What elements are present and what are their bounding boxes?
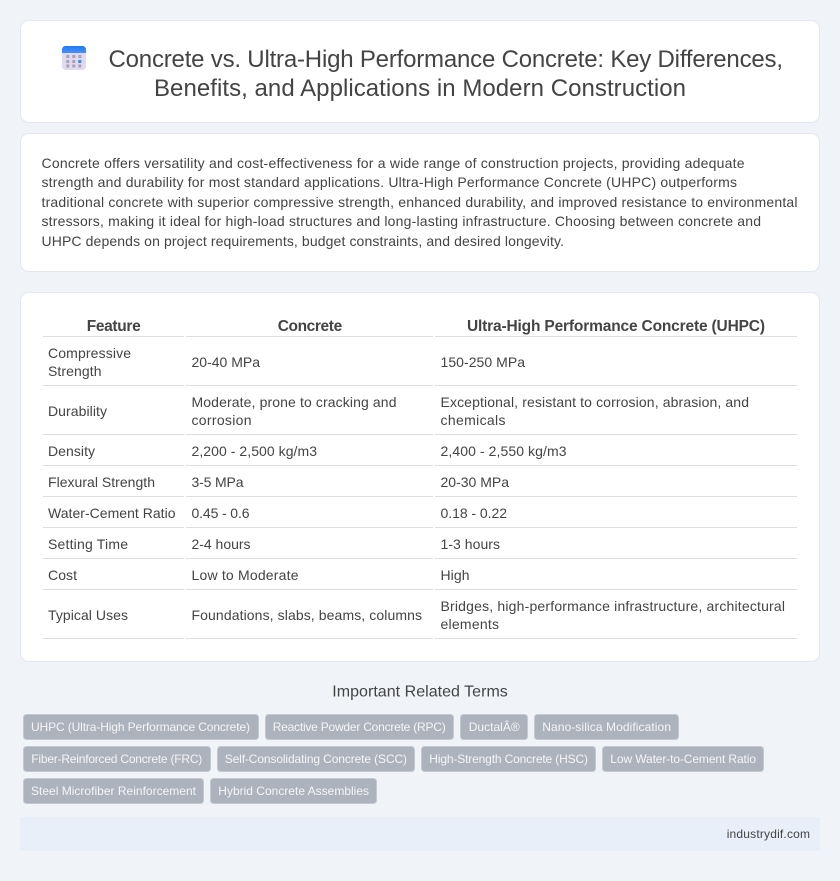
row: water-cement ratio: Water-Cement Ratio [48, 505, 176, 521]
table header row: Feature [87, 318, 141, 335]
text block: introduction paragraph: stressors, making it ideal for high-load structures and long-lasting infrastructure. Choosing between concrete and [42, 213, 761, 229]
row: flexural strength [48, 474, 509, 490]
table grid lines [43, 336, 797, 639]
text block: introduction paragraph: traditional concrete with superior compressive strength, enhanced durability, and improved resistance to environmental [42, 194, 798, 210]
footer [20, 817, 820, 851]
row: cost: High [440, 567, 470, 583]
panel: comparison table [20, 292, 820, 662]
chip: Ductal: DuctalÂ® [469, 719, 520, 734]
row: durability: Moderate, prone to cracking and [192, 394, 396, 410]
chip: nano-silica: Nano-silica Modification [542, 720, 671, 734]
text block: introduction paragraph [42, 155, 798, 249]
title [108, 46, 783, 102]
chip: Ductal [460, 714, 528, 740]
chip: RPC: Reactive Powder Concrete (RPC) [273, 720, 446, 734]
row: water-cement ratio: 0.45 - 0.6 [192, 505, 250, 521]
chip: RPC [266, 714, 454, 740]
row: water-cement ratio: 0.18 - 0.22 [440, 505, 507, 521]
title: Benefits, and Applications in Modern Construction [154, 75, 686, 102]
chip: SCC: Self-Consolidating Concrete (SCC) [225, 752, 407, 766]
row: flexural strength: Flexural Strength [48, 474, 155, 490]
chip: SCC [218, 746, 414, 772]
text block: introduction paragraph: strength and durability for most standard applications. Ultra-High Performance Concrete (UHPC) outperforms [42, 174, 737, 190]
related term chips [24, 714, 764, 804]
row: density: Density [48, 443, 95, 459]
panel: header [20, 20, 820, 122]
footer: industrydif.com [727, 827, 810, 841]
row: durability [48, 394, 749, 428]
row: durability: chemicals [440, 412, 506, 428]
row: flexural strength: 20-30 MPa [440, 474, 509, 490]
text block: introduction paragraph: Concrete offers versatility and cost-effectiveness for a wide range of construction projects, providing adequate [42, 155, 745, 171]
chip: UHPC: UHPC (Ultra-High Performance Concrete) [31, 720, 250, 734]
row: compressive strength [48, 345, 525, 379]
chip: steel microfiber [24, 778, 204, 804]
row: water-cement ratio [48, 505, 507, 521]
row: flexural strength: 3-5 MPa [192, 474, 244, 490]
row: setting time: 1-3 hours [440, 536, 500, 552]
heading: important related terms: Important Related Terms [332, 684, 508, 700]
row: compressive strength: 150-250 MPa [440, 354, 525, 370]
row: cost: Low to Moderate [192, 567, 299, 583]
row: density [48, 443, 567, 459]
row: density: 2,400 - 2,550 kg/m3 [440, 443, 567, 459]
chip: FRC: Fiber-Reinforced Concrete (FRC) [31, 752, 202, 766]
table header row [87, 318, 765, 335]
row: typical uses: Typical Uses [48, 607, 128, 623]
row: setting time: 2-4 hours [192, 536, 250, 552]
row: typical uses: Foundations, slabs, beams, columns [192, 607, 422, 623]
chip: FRC [24, 746, 210, 772]
chip: nano-silica [534, 714, 678, 740]
title: Concrete vs. Ultra-High Performance Concrete: Key Differences, [108, 46, 783, 73]
chip: low water-to-cement [602, 746, 764, 772]
row: typical uses: elements [440, 616, 499, 632]
panel: introduction [20, 134, 820, 272]
text block: introduction paragraph: UHPC depends on project requirements, budget constraints, and desired longevity. [42, 233, 564, 249]
icon: calendar [62, 46, 86, 70]
chip: UHPC [24, 714, 258, 740]
row: compressive strength: 20-40 MPa [192, 354, 260, 370]
chip: HSC [422, 746, 596, 772]
row: durability: Durability [48, 403, 107, 419]
chip: hybrid assemblies: Hybrid Concrete Assemblies [218, 784, 369, 798]
table header row: Ultra-High Performance Concrete (UHPC) [467, 318, 765, 335]
row: typical uses: Bridges, high-performance infrastructure, architectural [440, 598, 785, 614]
row: durability: corrosion [192, 412, 252, 428]
row: density: 2,200 - 2,500 kg/m3 [192, 443, 317, 459]
row: compressive strength: Strength [48, 363, 102, 379]
chip: steel microfiber: Steel Microfiber Reinforcement [31, 784, 197, 798]
chip: HSC: High-Strength Concrete (HSC) [429, 752, 588, 766]
row: setting time: Setting Time [48, 536, 128, 552]
row: cost [48, 567, 470, 583]
row: typical uses [48, 598, 785, 632]
row: cost: Cost [48, 567, 77, 583]
row: compressive strength: Compressive [48, 345, 131, 361]
row: durability: Exceptional, resistant to corrosion, abrasion, and [440, 394, 749, 410]
row: setting time [48, 536, 500, 552]
chip: low water-to-cement: Low Water-to-Cement Ratio [610, 752, 756, 766]
chip: hybrid assemblies [210, 778, 376, 804]
table header row: Concrete [278, 318, 343, 335]
